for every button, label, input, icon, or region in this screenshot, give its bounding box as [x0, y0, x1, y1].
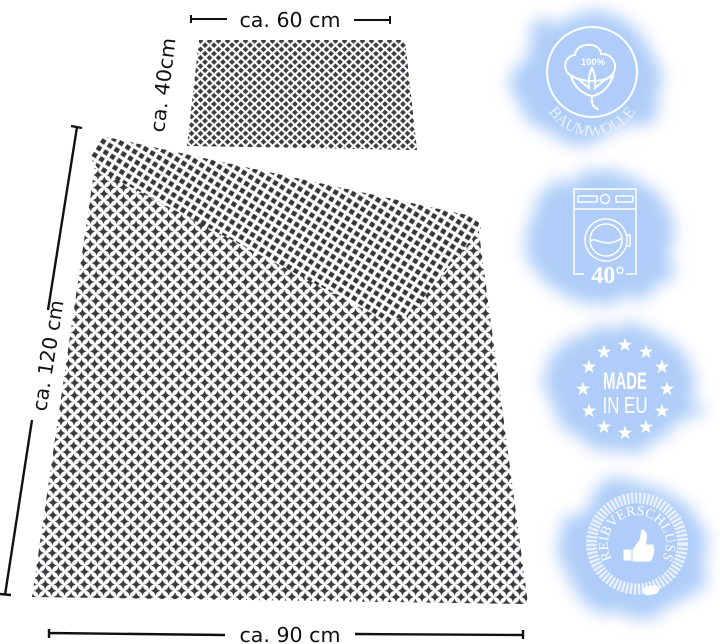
ring of stars [576, 338, 674, 439]
badge: 100% Baumwolle [501, 2, 672, 154]
washing machine icon [574, 189, 636, 274]
badge: made in EU [546, 326, 698, 450]
watercolor blob [511, 12, 659, 144]
Reibverschluss label: REIBVERSCHLUSS [598, 506, 676, 562]
dimension: 120 cm height: ca. 120 cm [27, 298, 68, 413]
made in EU label [602, 368, 648, 418]
dimension: 90 cm width [49, 623, 523, 644]
dimension: 120 cm height [0, 126, 82, 595]
watercolor blob [560, 484, 708, 620]
thumbs up icon [624, 530, 654, 561]
zipper pull [642, 584, 660, 596]
dimension: 40 cm height: ca. 40cm [145, 36, 181, 134]
badge: zipper [548, 468, 717, 628]
duvet folded flap [88, 136, 481, 322]
dimension: 60 cm width: ca. 60 cm [240, 8, 340, 32]
zipper ring [592, 498, 682, 589]
Baumwolle label: BAUMWOLLE [548, 106, 635, 136]
watercolor blob [546, 326, 698, 450]
pillow [187, 40, 417, 150]
made in EU label: IN EU [602, 392, 648, 418]
40 degrees label: 40° [591, 263, 625, 289]
watercolor blob [525, 172, 677, 304]
duvet body [32, 165, 528, 604]
duvet cover [32, 136, 528, 604]
made in EU label: MADE [603, 368, 647, 395]
dimension: 60 cm width [191, 8, 390, 32]
cotton icon [547, 27, 637, 117]
100% label: 100% [581, 57, 606, 68]
badge: wash at 40 degrees [525, 172, 677, 304]
